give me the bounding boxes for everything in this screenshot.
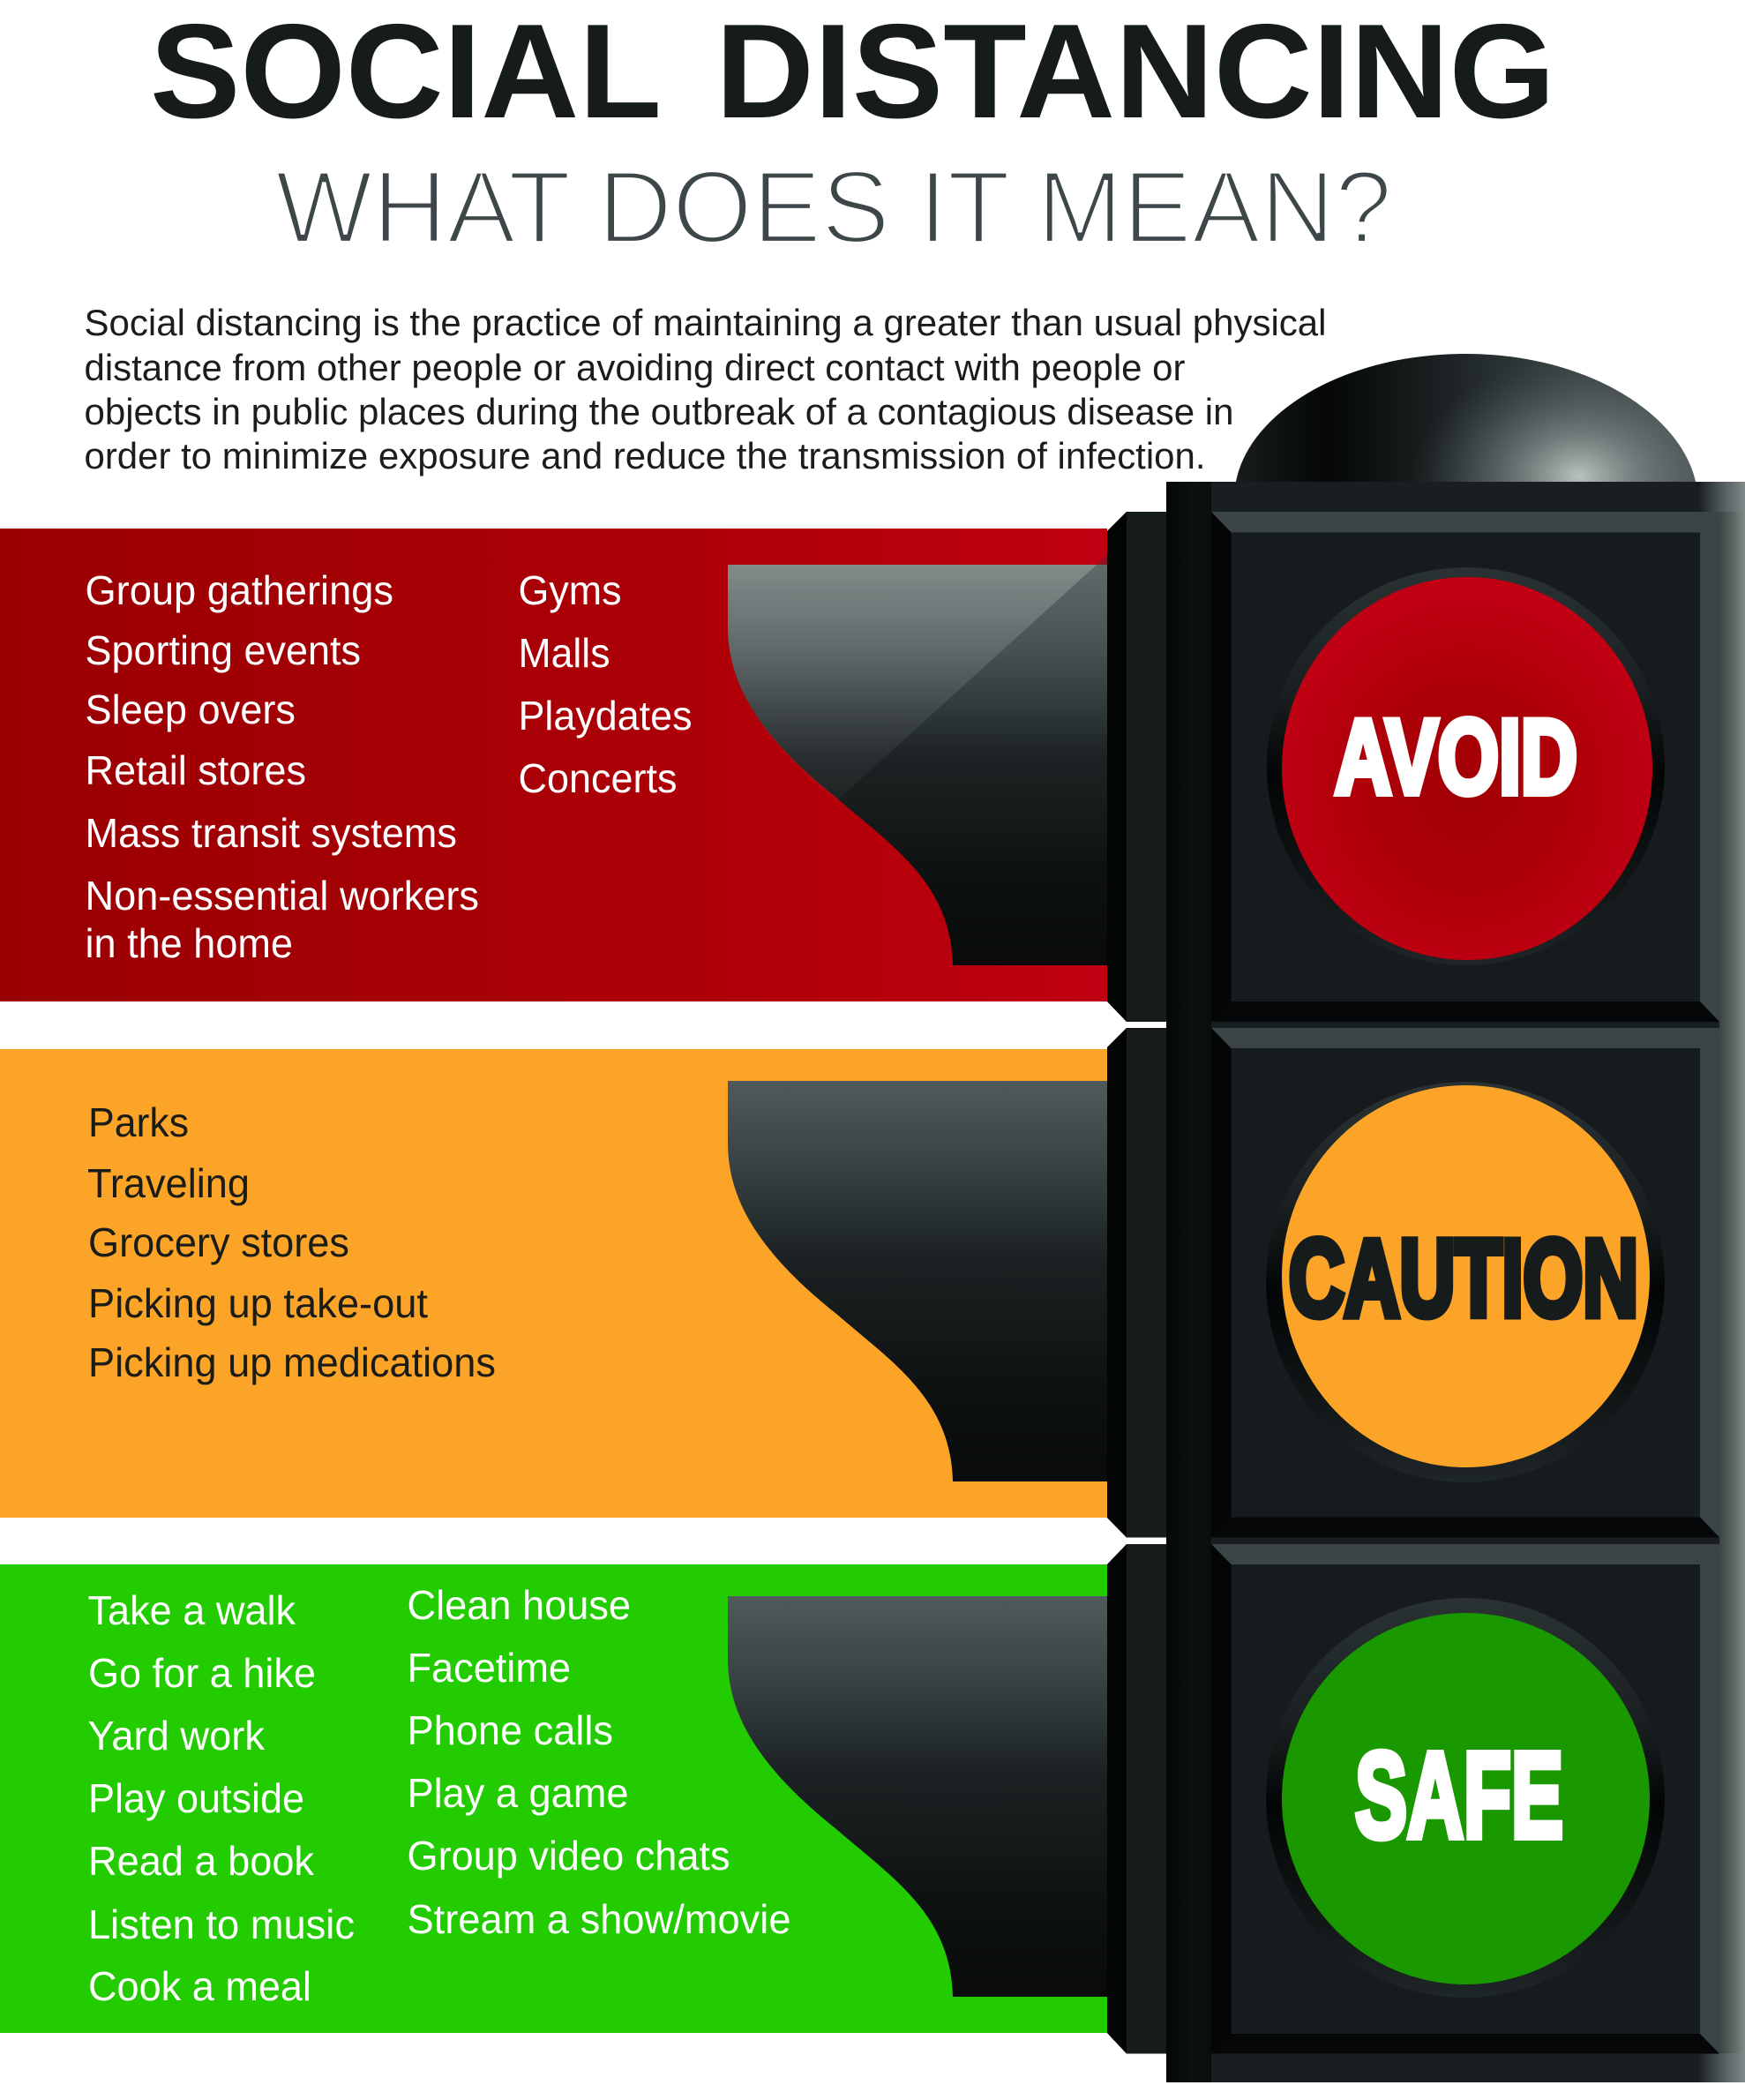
label: avoid: AVOID [1335, 698, 1577, 816]
caution list: Picking up medications [88, 1339, 496, 1385]
intro text block: distance from other people or avoiding direct contact with people or [85, 347, 1186, 388]
safe list: Group video chats [408, 1833, 730, 1879]
lamp: avoid [1267, 567, 1665, 965]
safe list: Phone calls [408, 1707, 613, 1753]
avoid lens hood [728, 555, 1107, 965]
safe band [0, 1564, 1107, 2033]
caution list [87, 1099, 496, 1385]
avoid list: Mass transit systems [85, 810, 457, 856]
signal frame: caution [1211, 1028, 1719, 1537]
avoid list: Sporting events [85, 627, 361, 673]
avoid list: Group gatherings [85, 567, 393, 613]
safe list: Clean house [408, 1582, 631, 1628]
caution lens hood [728, 1081, 1107, 1481]
title [150, 0, 1555, 146]
caution band [0, 1049, 1107, 1518]
avoid list: Retail stores [85, 747, 306, 793]
avoid list [85, 567, 692, 966]
avoid list: Playdates [519, 693, 692, 739]
safe list: Facetime [408, 1645, 571, 1691]
safe list: Play a game [408, 1770, 628, 1816]
avoid band [0, 529, 1107, 1001]
caution list: Picking up take-out [88, 1280, 428, 1326]
avoid list: Malls [519, 630, 610, 676]
label: safe: SAFE [1355, 1728, 1563, 1864]
panel: avoid [0, 529, 1107, 1001]
safe list: Cook a meal [88, 1963, 311, 2009]
avoid list: Concerts [519, 755, 678, 801]
avoid list: Gyms [519, 567, 621, 613]
subtitle: WHAT DOES IT MEAN? [275, 149, 1392, 265]
panel: safe [0, 1564, 1107, 2033]
safe list: Play outside [88, 1775, 304, 1821]
caution list: Traveling [87, 1160, 250, 1206]
caution list: Parks [88, 1099, 189, 1145]
avoid list: Sleep overs [85, 686, 296, 732]
safe list: Yard work [88, 1713, 266, 1759]
intro text block: objects in public places during the outbreak of a contagious disease in [85, 391, 1233, 432]
lamp: caution [1266, 1082, 1665, 1482]
safe list [88, 1582, 790, 2009]
caution list: Grocery stores [88, 1219, 349, 1265]
safe list: Listen to music [88, 1901, 355, 1947]
safe list: Take a walk [88, 1587, 296, 1633]
panel: caution [0, 1049, 1107, 1518]
intro text block: Social distancing is the practice of maintaining a greater than usual physical [85, 302, 1327, 343]
dome cap [1236, 354, 1696, 482]
signal frame: safe [1211, 1544, 1719, 2054]
intro text block: order to minimize exposure and reduce the transmission of infection. [85, 435, 1206, 476]
safe lens hood [728, 1596, 1107, 1997]
title: DISTANCING [715, 0, 1555, 146]
avoid list: in the home [85, 920, 293, 966]
title: SOCIAL [150, 0, 662, 146]
traffic light housing [1107, 354, 1745, 2082]
safe list: Read a book [88, 1838, 315, 1884]
lamp: safe [1266, 1598, 1665, 1998]
intro text block [85, 302, 1327, 476]
side connectors [1107, 512, 1166, 2054]
avoid list: Non-essential workers [85, 873, 479, 919]
housing body [1166, 482, 1745, 2082]
safe list: Stream a show/movie [408, 1896, 790, 1942]
safe list: Go for a hike [88, 1650, 316, 1696]
signal frame: avoid [1211, 512, 1719, 1022]
